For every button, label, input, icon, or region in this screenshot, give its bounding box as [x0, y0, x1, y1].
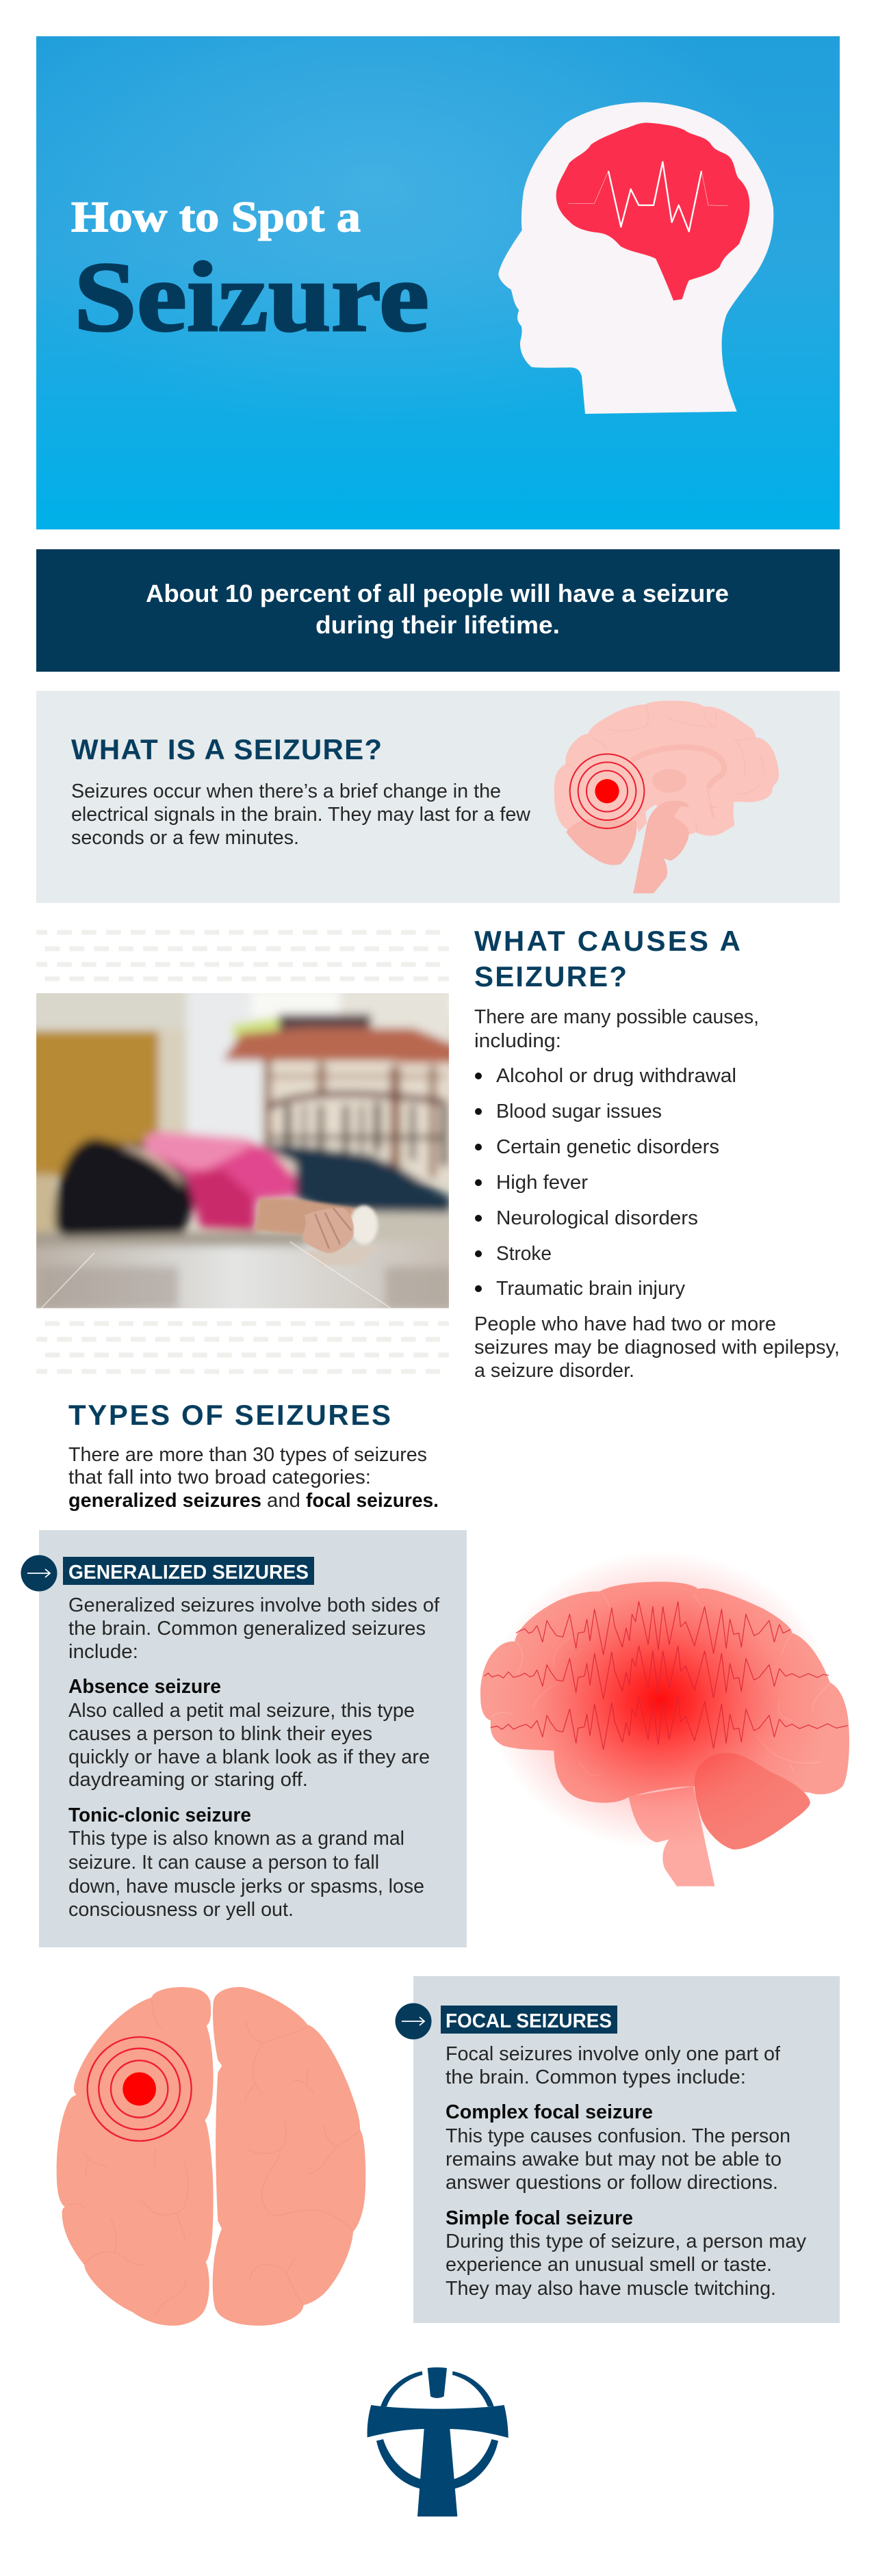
heading: types of seizures: TYPES OF SEIZURES [68, 1399, 391, 1431]
heading: what causes a seizure [474, 925, 740, 993]
icon: arrow circle [396, 2003, 431, 2040]
bulleted list of causes: Alcohol or drug withdrawal [496, 1065, 736, 1087]
text block: complex focal seizure: This type causes confusion. The person [446, 2125, 790, 2147]
text block: types intro: There are more than 30 types of seizures [68, 1444, 427, 1466]
panel: what is a seizure [36, 691, 840, 903]
hero title [71, 192, 429, 352]
text block: absence seizure: Also called a petit mal seizure, this type [68, 1700, 415, 1722]
icon: side view brain with target [554, 700, 779, 893]
bulleted list of causes: Traumatic brain injury [496, 1278, 685, 1300]
text block: types intro: generalized seizures [68, 1490, 261, 1512]
statistic callout bar [36, 549, 840, 672]
text block: focal description: Focal seizures involve only one part of [446, 2043, 781, 2065]
text block: tonic-clonic seizure: Tonic-clonic seizure [68, 1804, 251, 1826]
text block: generalized description [68, 1594, 440, 1663]
text block: simple focal seizure: During this type of seizure, a person may [446, 2231, 806, 2252]
text block: absence seizure: causes a person to blink their eyes [68, 1723, 372, 1745]
text block: absence seizure: quickly or have a blank look as if they are [68, 1746, 430, 1768]
text block: seizure definition [71, 780, 531, 849]
statistic callout bar: during their lifetime. [315, 611, 560, 639]
heading: what causes a seizure: SEIZURE? [474, 960, 627, 993]
tag: focal seizures: FOCAL SEIZURES [446, 2010, 612, 2032]
dashed pattern above photo [36, 932, 449, 979]
text block: absence seizure: Absence seizure [68, 1676, 221, 1698]
panel: generalized seizures [21, 1530, 467, 1947]
text block: tonic-clonic seizure: consciousness or yell out. [68, 1899, 294, 1921]
heartbeat line [568, 162, 727, 231]
text block: generalized description: include: [68, 1641, 138, 1663]
text block: types intro: and [267, 1490, 300, 1512]
text block: complex focal seizure: Complex focal seizure [446, 2101, 653, 2123]
text block: causes intro: There are many possible causes, [474, 1006, 759, 1028]
text block: simple focal seizure: experience an unusual smell or taste. [446, 2254, 772, 2276]
text block: causes intro [474, 1006, 759, 1052]
icon: arrow circle [21, 1555, 57, 1591]
text block: tonic-clonic seizure: This type is also known as a grand mal [68, 1828, 404, 1850]
bulleted list of causes: High fever [496, 1172, 588, 1194]
text block: seizure definition: seconds or a few minutes. [71, 827, 299, 849]
text block: complex focal seizure: remains awake but may not be able to [446, 2148, 782, 2170]
text block: epilepsy note [474, 1313, 840, 1382]
text block: focal description [446, 2043, 781, 2088]
text block: absence seizure: daydreaming or staring off. [68, 1769, 308, 1791]
section: what causes a seizure [474, 925, 840, 1382]
text block: generalized description: Generalized seizures involve both sides of [68, 1594, 440, 1616]
section: types of seizures intro [68, 1399, 439, 1512]
text block: tonic-clonic seizure: down, have muscle jerks or spasms, lose [68, 1876, 424, 1897]
paper head silhouette with red brain [498, 102, 773, 414]
text block: types intro: that fall into two broad categories: [68, 1467, 371, 1488]
text block: types intro [68, 1444, 439, 1512]
text block: generalized description: the brain. Common generalized seizures [68, 1618, 426, 1640]
dashed pattern below photo [36, 1324, 449, 1371]
text block: tonic-clonic seizure: seizure. It can cause a person to fall [68, 1852, 379, 1874]
statistic callout bar: About 10 percent of all people will have a seizure [146, 579, 729, 607]
text block: types intro: focal seizures. [306, 1490, 439, 1512]
text block: epilepsy note: People who have had two or more [474, 1313, 776, 1335]
text block: tonic-clonic seizure [68, 1804, 424, 1921]
text block: simple focal seizure: They may also have muscle twitching. [446, 2278, 776, 2300]
heading: what is a seizure: WHAT IS A SEIZURE? [71, 733, 382, 765]
text block: focal description: the brain. Common types include: [446, 2066, 746, 2088]
illustration: brain with seizure waves and red glow [480, 1551, 849, 1887]
text block: seizure definition: Seizures occur when there’s a brief change in the [71, 780, 501, 802]
bulleted list of causes [475, 1065, 736, 1300]
panel: focal seizures [396, 1976, 840, 2323]
heading: what causes a seizure: WHAT CAUSES A [474, 925, 740, 957]
target rings [570, 754, 644, 828]
text block: causes intro: including: [474, 1030, 561, 1052]
text block: seizure definition: electrical signals in the brain. They may last for a few [71, 804, 531, 826]
bulleted list of causes: Neurological disorders [496, 1207, 698, 1229]
hero title: How to Spot a [71, 192, 361, 241]
text block: epilepsy note: seizures may be diagnosed with epilepsy, [474, 1337, 840, 1358]
tag: generalized seizures: GENERALIZED SEIZURES [68, 1562, 309, 1583]
text block: epilepsy note: a seizure disorder. [474, 1360, 634, 1382]
hero banner [36, 36, 840, 529]
bulleted list of causes: Blood sugar issues [496, 1101, 662, 1122]
logo: cross and circle emblem [368, 2367, 508, 2516]
hero title: Seizure [74, 241, 429, 352]
text block: simple focal seizure: Simple focal seizure [446, 2207, 633, 2229]
seizure wave lines [485, 1601, 848, 1750]
bulleted list of causes: Certain genetic disorders [496, 1136, 719, 1158]
photo: person lying on floor during seizure [36, 993, 449, 1308]
text block: simple focal seizure [446, 2207, 806, 2300]
red brain [556, 122, 749, 300]
bulleted list of causes: Stroke [496, 1243, 552, 1265]
illustration: top view brain with target [57, 1987, 365, 2326]
text block: absence seizure [68, 1676, 430, 1791]
text block: complex focal seizure: answer questions or follow directions. [446, 2172, 778, 2194]
text block: complex focal seizure [446, 2101, 790, 2194]
target rings [88, 2037, 192, 2141]
